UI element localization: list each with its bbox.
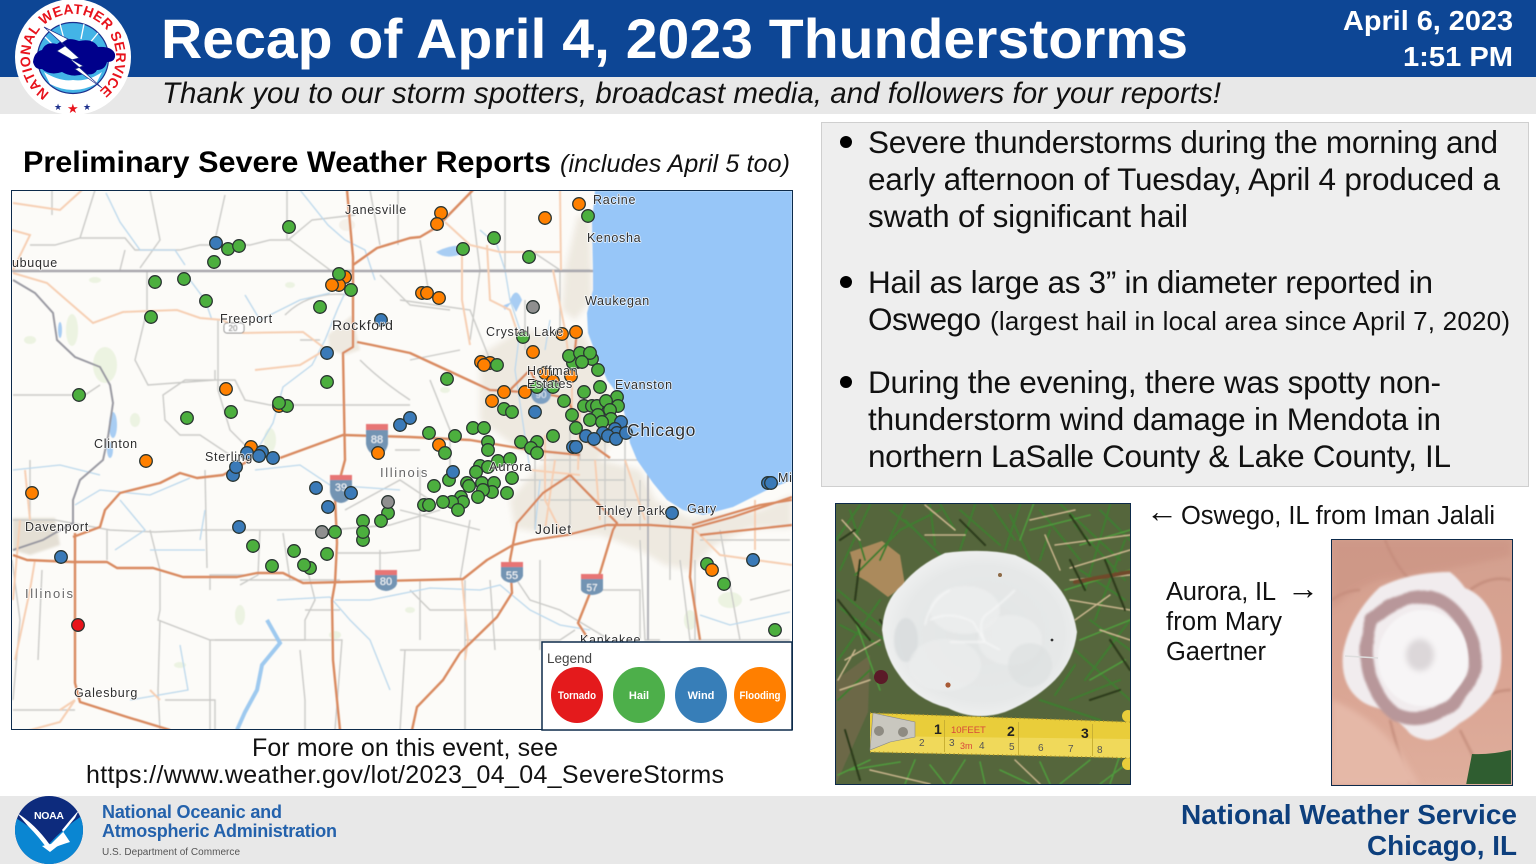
bullet: largest hail: (largest hail in local area since April 7, 2020) bbox=[990, 306, 1510, 336]
bullet: largest hail: Hail as large as 3” in diameter reported in bbox=[868, 264, 1433, 300]
subtitle: Thank you to our storm spotters, broadcast media, and followers for your reports! bbox=[162, 77, 1221, 110]
hailstone bbox=[882, 551, 1077, 716]
city labels: Hoffman bbox=[527, 364, 578, 378]
highway shields bbox=[224, 323, 603, 595]
legend: wind bbox=[675, 667, 727, 723]
caption: Oswego photo bbox=[1146, 493, 1495, 530]
county and state roads bbox=[12, 190, 790, 730]
title: Recap of April 4, 2023 Thunderstorms bbox=[161, 7, 1188, 70]
bullet: wind damage bbox=[840, 364, 1451, 474]
city labels: Chicago bbox=[627, 420, 696, 440]
header banner bbox=[0, 0, 1536, 114]
city labels: Waukegan bbox=[585, 294, 650, 308]
city labels: Kankakee bbox=[580, 633, 641, 647]
city labels: ubuque bbox=[12, 256, 58, 270]
more information text: https://www.weather.gov/lot/2023_04_04_SevereStorms bbox=[86, 761, 724, 789]
caption: Oswego photo: Oswego, IL from Iman Jalali bbox=[1181, 502, 1495, 530]
NOAA organisation text: U.S. Department of Commerce bbox=[102, 847, 240, 858]
bullet: significant hail: Severe thunderstorms during the morning and bbox=[868, 124, 1498, 160]
tape measure: 3 bbox=[949, 738, 955, 749]
tornado report bbox=[72, 619, 84, 631]
highway shields: 20 bbox=[229, 324, 238, 333]
date and time: 1:51 PM bbox=[1403, 41, 1513, 72]
tape measure: 8 bbox=[1097, 745, 1103, 756]
hailstone bbox=[1343, 572, 1501, 740]
highway shields: 39 bbox=[335, 482, 347, 494]
report markers bbox=[26, 198, 781, 636]
photo: Aurora hailstone in hand bbox=[1332, 540, 1512, 786]
caption: Aurora photo bbox=[1166, 570, 1319, 666]
tape measure: 4 bbox=[979, 741, 985, 752]
city labels: Kenosha bbox=[587, 231, 641, 245]
tape measure: 6 bbox=[1038, 743, 1044, 754]
panel: event summary bbox=[822, 122, 1528, 486]
city labels: Mic bbox=[778, 471, 800, 485]
legend: tornado: Tornado bbox=[558, 690, 596, 702]
NOAA organisation text: National Oceanic and bbox=[102, 802, 282, 822]
legend: wind: Wind bbox=[688, 690, 714, 702]
Lake Michigan bbox=[587, 191, 792, 515]
icon: NOAA logo: NOAA bbox=[34, 810, 64, 822]
city labels: Tinley Park bbox=[596, 504, 666, 518]
city labels: Joliet bbox=[535, 521, 572, 537]
city labels: Rockford bbox=[332, 317, 394, 333]
urban areas bbox=[13, 215, 792, 570]
map: severe weather reports bbox=[12, 190, 800, 735]
tape measure: 7 bbox=[1068, 744, 1074, 755]
map legend bbox=[542, 642, 792, 730]
caption: Aurora photo: Gaertner bbox=[1166, 638, 1266, 666]
tape measure: 3 bbox=[1081, 725, 1089, 741]
highway shields: 57 bbox=[586, 583, 598, 594]
city labels: Davenport bbox=[25, 520, 89, 534]
caption: Aurora photo: → bbox=[1287, 570, 1319, 606]
flooding reports bbox=[26, 198, 585, 499]
highway shields: 88 bbox=[371, 434, 383, 446]
interstate highways bbox=[13, 190, 792, 730]
city labels: Galesburg bbox=[74, 686, 138, 700]
icon: NOAA logo bbox=[15, 796, 83, 864]
city labels: Aurora bbox=[489, 459, 532, 474]
tape measure: 1 bbox=[934, 721, 942, 737]
legend: tornado bbox=[551, 667, 603, 723]
National Weather Service office bbox=[1181, 799, 1517, 861]
legend title: Legend bbox=[547, 651, 592, 666]
berry bbox=[874, 670, 888, 684]
more information text: For more on this event, see bbox=[252, 734, 558, 762]
rivers bbox=[13, 190, 790, 700]
date and time bbox=[1343, 5, 1513, 72]
photo: Oswego hailstone on grass bbox=[836, 500, 1134, 784]
map heading: Preliminary Severe Weather Reports bbox=[23, 146, 551, 179]
caption: Oswego photo: ← bbox=[1146, 493, 1178, 529]
NOAA organisation text: Atmospheric Administration bbox=[102, 821, 337, 841]
icon: National Weather Service logo: NATIONAL WEATHER SERVICE bbox=[20, 4, 126, 100]
tape measure: 5 bbox=[1009, 742, 1015, 753]
map heading bbox=[23, 146, 790, 179]
dead leaf bbox=[850, 541, 905, 597]
inland lakes bbox=[58, 246, 522, 458]
legend: hail bbox=[613, 667, 665, 723]
city labels: Evanston bbox=[615, 378, 673, 392]
more information text bbox=[86, 734, 724, 789]
map heading: (includes April 5 too) bbox=[560, 150, 790, 178]
caption: Aurora photo: Aurora, IL bbox=[1166, 578, 1276, 606]
state line bbox=[12, 270, 593, 272]
map base layers bbox=[12, 190, 792, 735]
city labels: Estates bbox=[527, 377, 573, 391]
minor highways bbox=[12, 190, 792, 735]
bullet: significant hail: early afternoon of Tuesday, April 4 produced a bbox=[868, 161, 1500, 197]
city labels bbox=[12, 193, 800, 700]
tape measure bbox=[870, 710, 1134, 770]
footer band bbox=[0, 796, 1536, 864]
tape measure: 3m bbox=[960, 741, 973, 751]
bullet: wind damage: During the evening, there was spotty non- bbox=[868, 364, 1441, 400]
NOAA organisation text bbox=[102, 802, 337, 858]
highway shields: 80 bbox=[380, 576, 392, 588]
tape measure: 2 bbox=[1007, 723, 1015, 739]
city labels: Racine bbox=[593, 193, 636, 207]
city labels: Freeport bbox=[220, 312, 273, 326]
highway shields: 90 bbox=[535, 390, 547, 401]
highway shields: 55 bbox=[506, 570, 518, 582]
wind reports bbox=[55, 237, 777, 566]
National Weather Service office: Chicago, IL bbox=[1367, 830, 1517, 861]
city labels: Clinton bbox=[94, 437, 138, 451]
city labels: Crystal Lake bbox=[486, 325, 564, 339]
date and time: April 6, 2023 bbox=[1343, 5, 1513, 36]
city labels: Sterling bbox=[205, 450, 253, 464]
hail reports bbox=[73, 210, 781, 636]
legend: hail: Hail bbox=[629, 690, 649, 702]
caption: Aurora photo: from Mary bbox=[1166, 608, 1282, 636]
icon: National Weather Service logo: ★ bbox=[54, 102, 62, 112]
city labels: Gary bbox=[687, 502, 717, 516]
Mississippi River bbox=[13, 280, 113, 550]
bullet: wind damage: thunderstorm wind damage in Mendota in bbox=[868, 401, 1441, 437]
icon: National Weather Service logo: ★ bbox=[83, 102, 91, 112]
city labels: Janesville bbox=[345, 203, 407, 217]
unknown reports bbox=[316, 301, 539, 538]
bullet: significant hail bbox=[840, 124, 1500, 234]
Illinois River bbox=[237, 620, 280, 730]
icon: National Weather Service logo: ★ bbox=[67, 101, 79, 116]
bullet: largest hail bbox=[840, 264, 1510, 337]
bullet: significant hail: swath of significant hail bbox=[868, 198, 1188, 234]
legend: flooding bbox=[734, 667, 786, 723]
legend: flooding: Flooding bbox=[740, 690, 780, 702]
tape measure: 2 bbox=[919, 738, 925, 749]
city labels: Illinois bbox=[25, 586, 75, 601]
bullet: largest hail: Oswego bbox=[868, 301, 981, 337]
city labels: Illinois bbox=[380, 465, 429, 480]
National Weather Service office: National Weather Service bbox=[1181, 799, 1517, 830]
bullet: wind damage: northern LaSalle County & Lake County, IL bbox=[868, 438, 1451, 474]
tape measure: 10FEET bbox=[951, 725, 986, 736]
late flooding marker bbox=[706, 564, 718, 576]
